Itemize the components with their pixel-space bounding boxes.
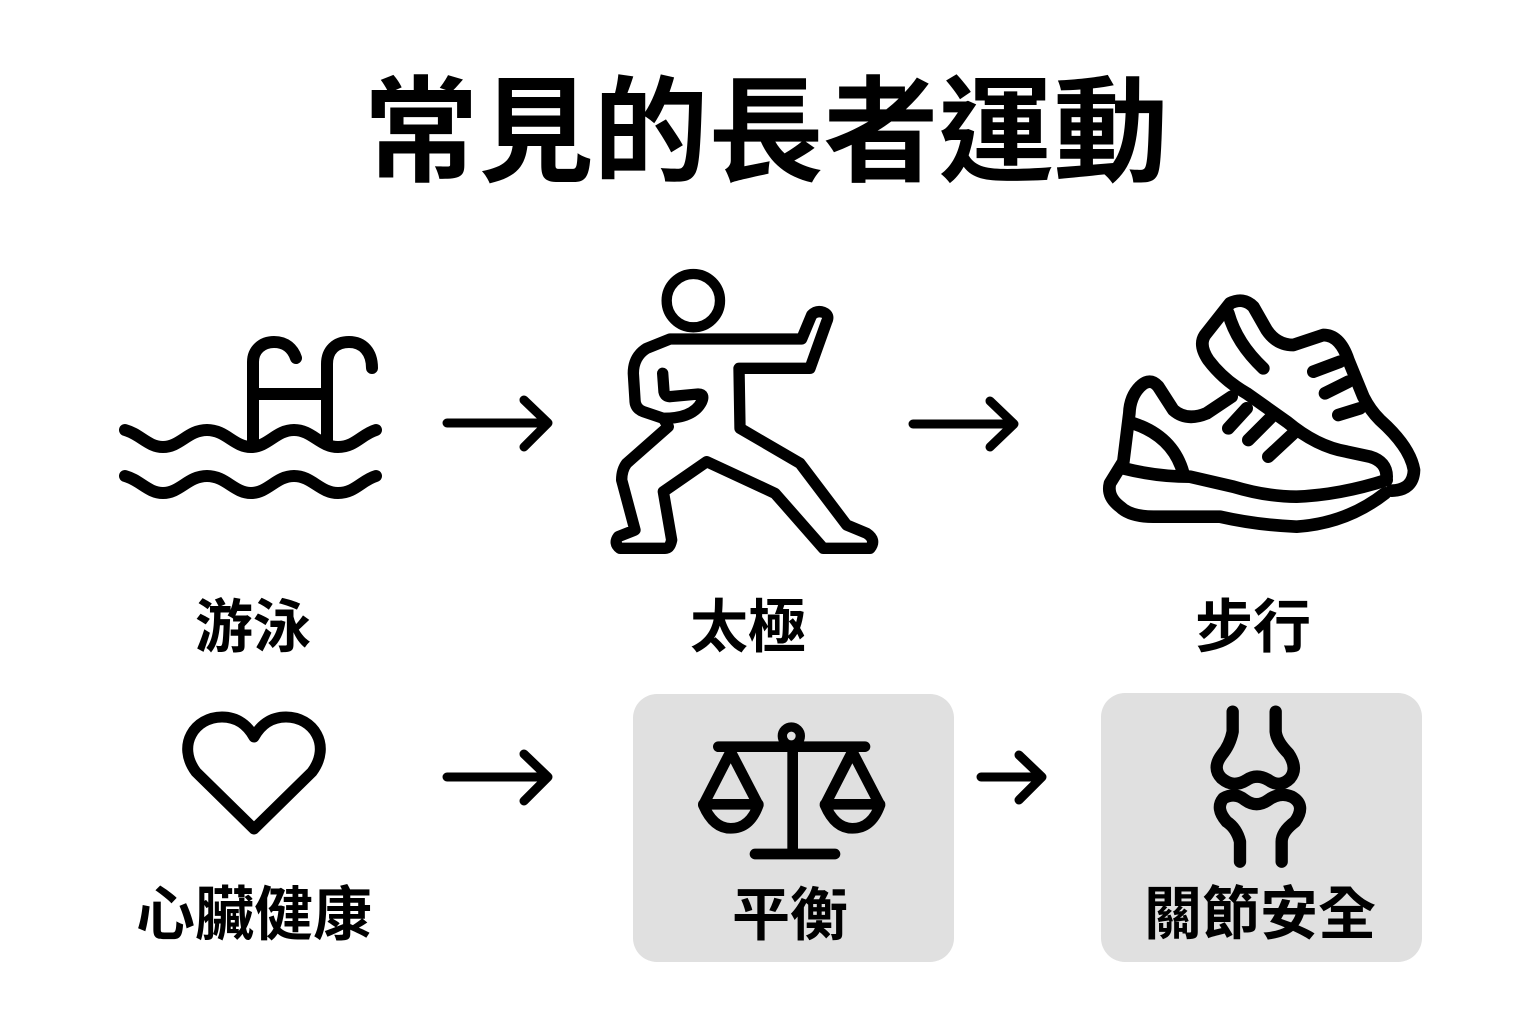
label: walking: 步行 <box>1195 595 1311 660</box>
panel: joint safety background <box>1101 693 1422 962</box>
label: heart health: 心臟健康 <box>136 882 372 948</box>
title: 常見的長者運動 <box>363 69 1168 197</box>
label: tai chi: 太極 <box>690 595 806 660</box>
panel: balance background <box>633 694 954 962</box>
arrow: heart to balance <box>447 754 548 801</box>
label: joint safety: 關節安全 <box>1144 882 1376 947</box>
icon: balance scales <box>703 727 880 854</box>
label: swimming: 游泳 <box>195 595 311 660</box>
icon: swimming pool <box>125 342 376 493</box>
label: balance: 平衡 <box>732 883 848 948</box>
icon: running shoes <box>1109 301 1414 527</box>
arrow: balance to joint safety <box>981 755 1042 800</box>
arrow: tai chi to walking <box>913 401 1014 447</box>
arrow: swimming to tai chi <box>447 400 548 447</box>
icon: heart <box>188 717 320 829</box>
icon: tai chi figure <box>616 274 873 548</box>
icon: knee joint <box>1217 712 1300 862</box>
